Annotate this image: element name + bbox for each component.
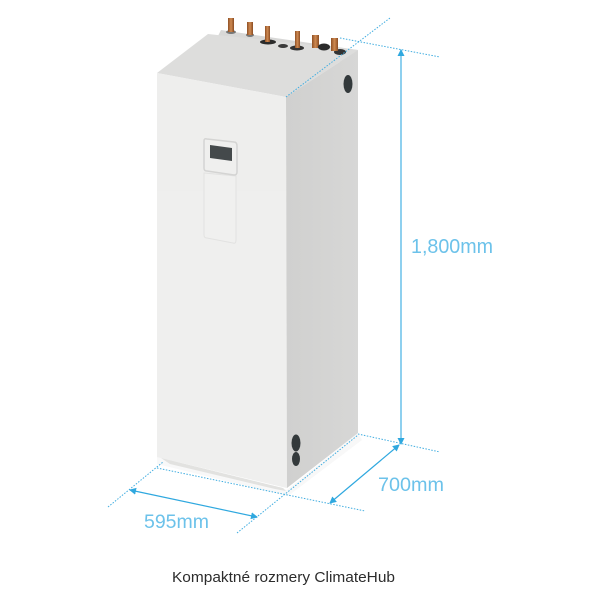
heat pump unit [157,18,362,496]
caption: Kompaktné rozmery ClimateHub [172,569,395,586]
side port top [344,75,352,93]
height label: 1,800mm [411,236,493,258]
lower front face tint [157,191,287,488]
width label: 595mm [144,512,209,533]
height arrow [400,50,402,444]
base plinth [161,458,286,491]
width arrow [130,490,257,517]
back plate with pipe fittings [218,30,358,62]
dimension lines [108,18,440,533]
front face [157,73,287,488]
display screen [210,145,232,161]
top face [157,34,358,97]
depth label: 700mm [378,475,444,496]
side face [286,50,358,488]
floor shadow [157,433,362,496]
copper pipes [226,18,346,55]
side ports bottom [292,434,300,466]
depth arrow [330,445,399,503]
control panel [204,139,237,243]
